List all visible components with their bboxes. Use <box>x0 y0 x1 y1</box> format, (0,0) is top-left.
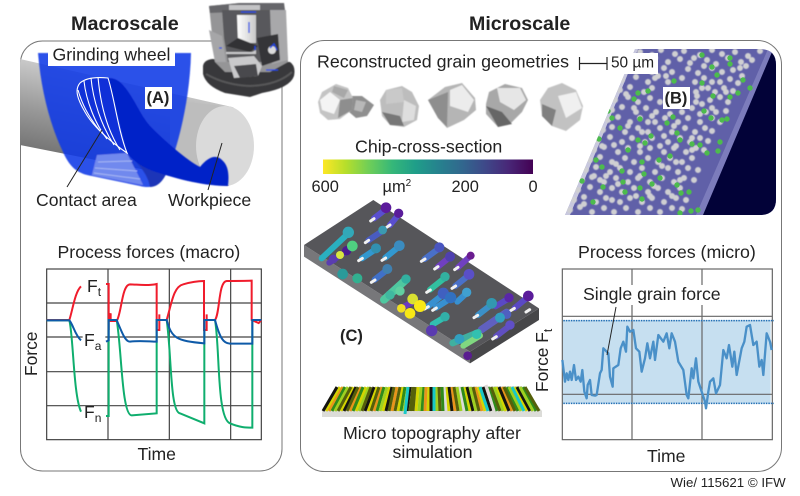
chip heads <box>329 202 534 360</box>
colour scale: 200 <box>452 178 479 196</box>
axis label: Time: Time <box>138 444 176 464</box>
axis label: Force Ft: Force F <box>532 332 552 392</box>
curve: Fn <box>47 320 252 428</box>
grid and frame <box>562 269 772 440</box>
label: Micro topography after simulation <box>343 423 521 462</box>
curve: Fa <box>47 320 261 344</box>
grains <box>318 83 583 131</box>
label: Single grain force: Single grain force <box>583 284 721 304</box>
label: (C): (C) <box>340 327 363 345</box>
label: (B) <box>663 87 690 109</box>
grinding wheel <box>38 53 228 187</box>
chart: macro process forces <box>47 269 261 440</box>
colour scale: 600 <box>312 178 339 196</box>
dotted limits <box>563 321 774 403</box>
force band <box>562 320 771 403</box>
scale bar: 50 µm <box>611 54 654 72</box>
label: Reconstructed grain geometries: Reconstructed grain geometries <box>317 52 569 72</box>
label: Fn: n <box>95 411 101 425</box>
grid and frame <box>47 269 261 440</box>
colour scale: 0 <box>528 178 538 196</box>
icon: grinding machine <box>203 3 294 97</box>
white masks for labels <box>83 334 105 426</box>
chart: micro process forces <box>562 269 774 440</box>
label: Fa: a <box>95 339 102 353</box>
heading: Microscale: Microscale <box>469 13 570 35</box>
curve: Ft <box>47 281 261 330</box>
label: (B): (B) <box>664 90 687 108</box>
label: Ft: t <box>98 285 102 299</box>
green grains <box>582 55 750 213</box>
workpiece cylinder <box>20 59 254 186</box>
label: Contact area: Contact area <box>36 190 137 210</box>
axis label: Force Ft: t <box>541 328 555 332</box>
micro topography <box>322 385 542 417</box>
heading: Process forces (macro): Process forces (macro) <box>58 242 240 262</box>
label: Micro topography after simulation: simulation <box>392 442 473 462</box>
simulation plate (C) <box>304 200 539 363</box>
axis label: Time: Time <box>647 446 685 466</box>
heading: Process forces (micro): Process forces (micro) <box>578 242 756 262</box>
label: Ft: F <box>87 276 98 296</box>
axis label: Force: Force <box>21 332 41 376</box>
chip tails <box>322 209 528 346</box>
leader: workpiece <box>208 143 222 190</box>
white chip ends <box>359 219 530 339</box>
colour scale: µm <box>382 178 406 196</box>
label: Micro topography after simulation: Micro topography after <box>343 423 521 443</box>
panel: macroscale <box>20 41 282 471</box>
panel: microscale <box>300 40 782 472</box>
label box: Grinding wheel: Grinding wheel <box>52 44 170 64</box>
illustration: grinding wheel on workpiece <box>20 53 254 187</box>
white grains <box>570 50 760 212</box>
force trace <box>562 325 772 408</box>
label: Fn: F <box>84 402 95 422</box>
leader: contact area <box>67 130 102 187</box>
grain 3 <box>428 83 476 128</box>
label: (A): (A) <box>146 89 169 107</box>
label: Chip-cross-section: Chip-cross-section <box>355 136 502 156</box>
label: (A) <box>145 87 172 109</box>
heading: Macroscale: Macroscale <box>71 13 179 35</box>
colour scale: 2 <box>406 178 412 189</box>
credit: Wie/ 115621 © IFW <box>670 475 786 490</box>
panel image (B): grain-covered wheel <box>565 49 776 215</box>
label: Single grain force <box>582 284 724 355</box>
grain 2 <box>380 86 419 127</box>
label: Fa: F <box>84 330 95 350</box>
label: Workpiece: Workpiece <box>168 190 251 210</box>
plate <box>304 200 539 363</box>
wheel surface <box>565 49 776 215</box>
colour scale <box>312 160 538 196</box>
scale bar <box>576 53 658 74</box>
grain 4 <box>486 84 528 127</box>
grain 1 <box>318 84 374 120</box>
contact area <box>77 77 127 153</box>
grain 5 <box>540 83 583 131</box>
